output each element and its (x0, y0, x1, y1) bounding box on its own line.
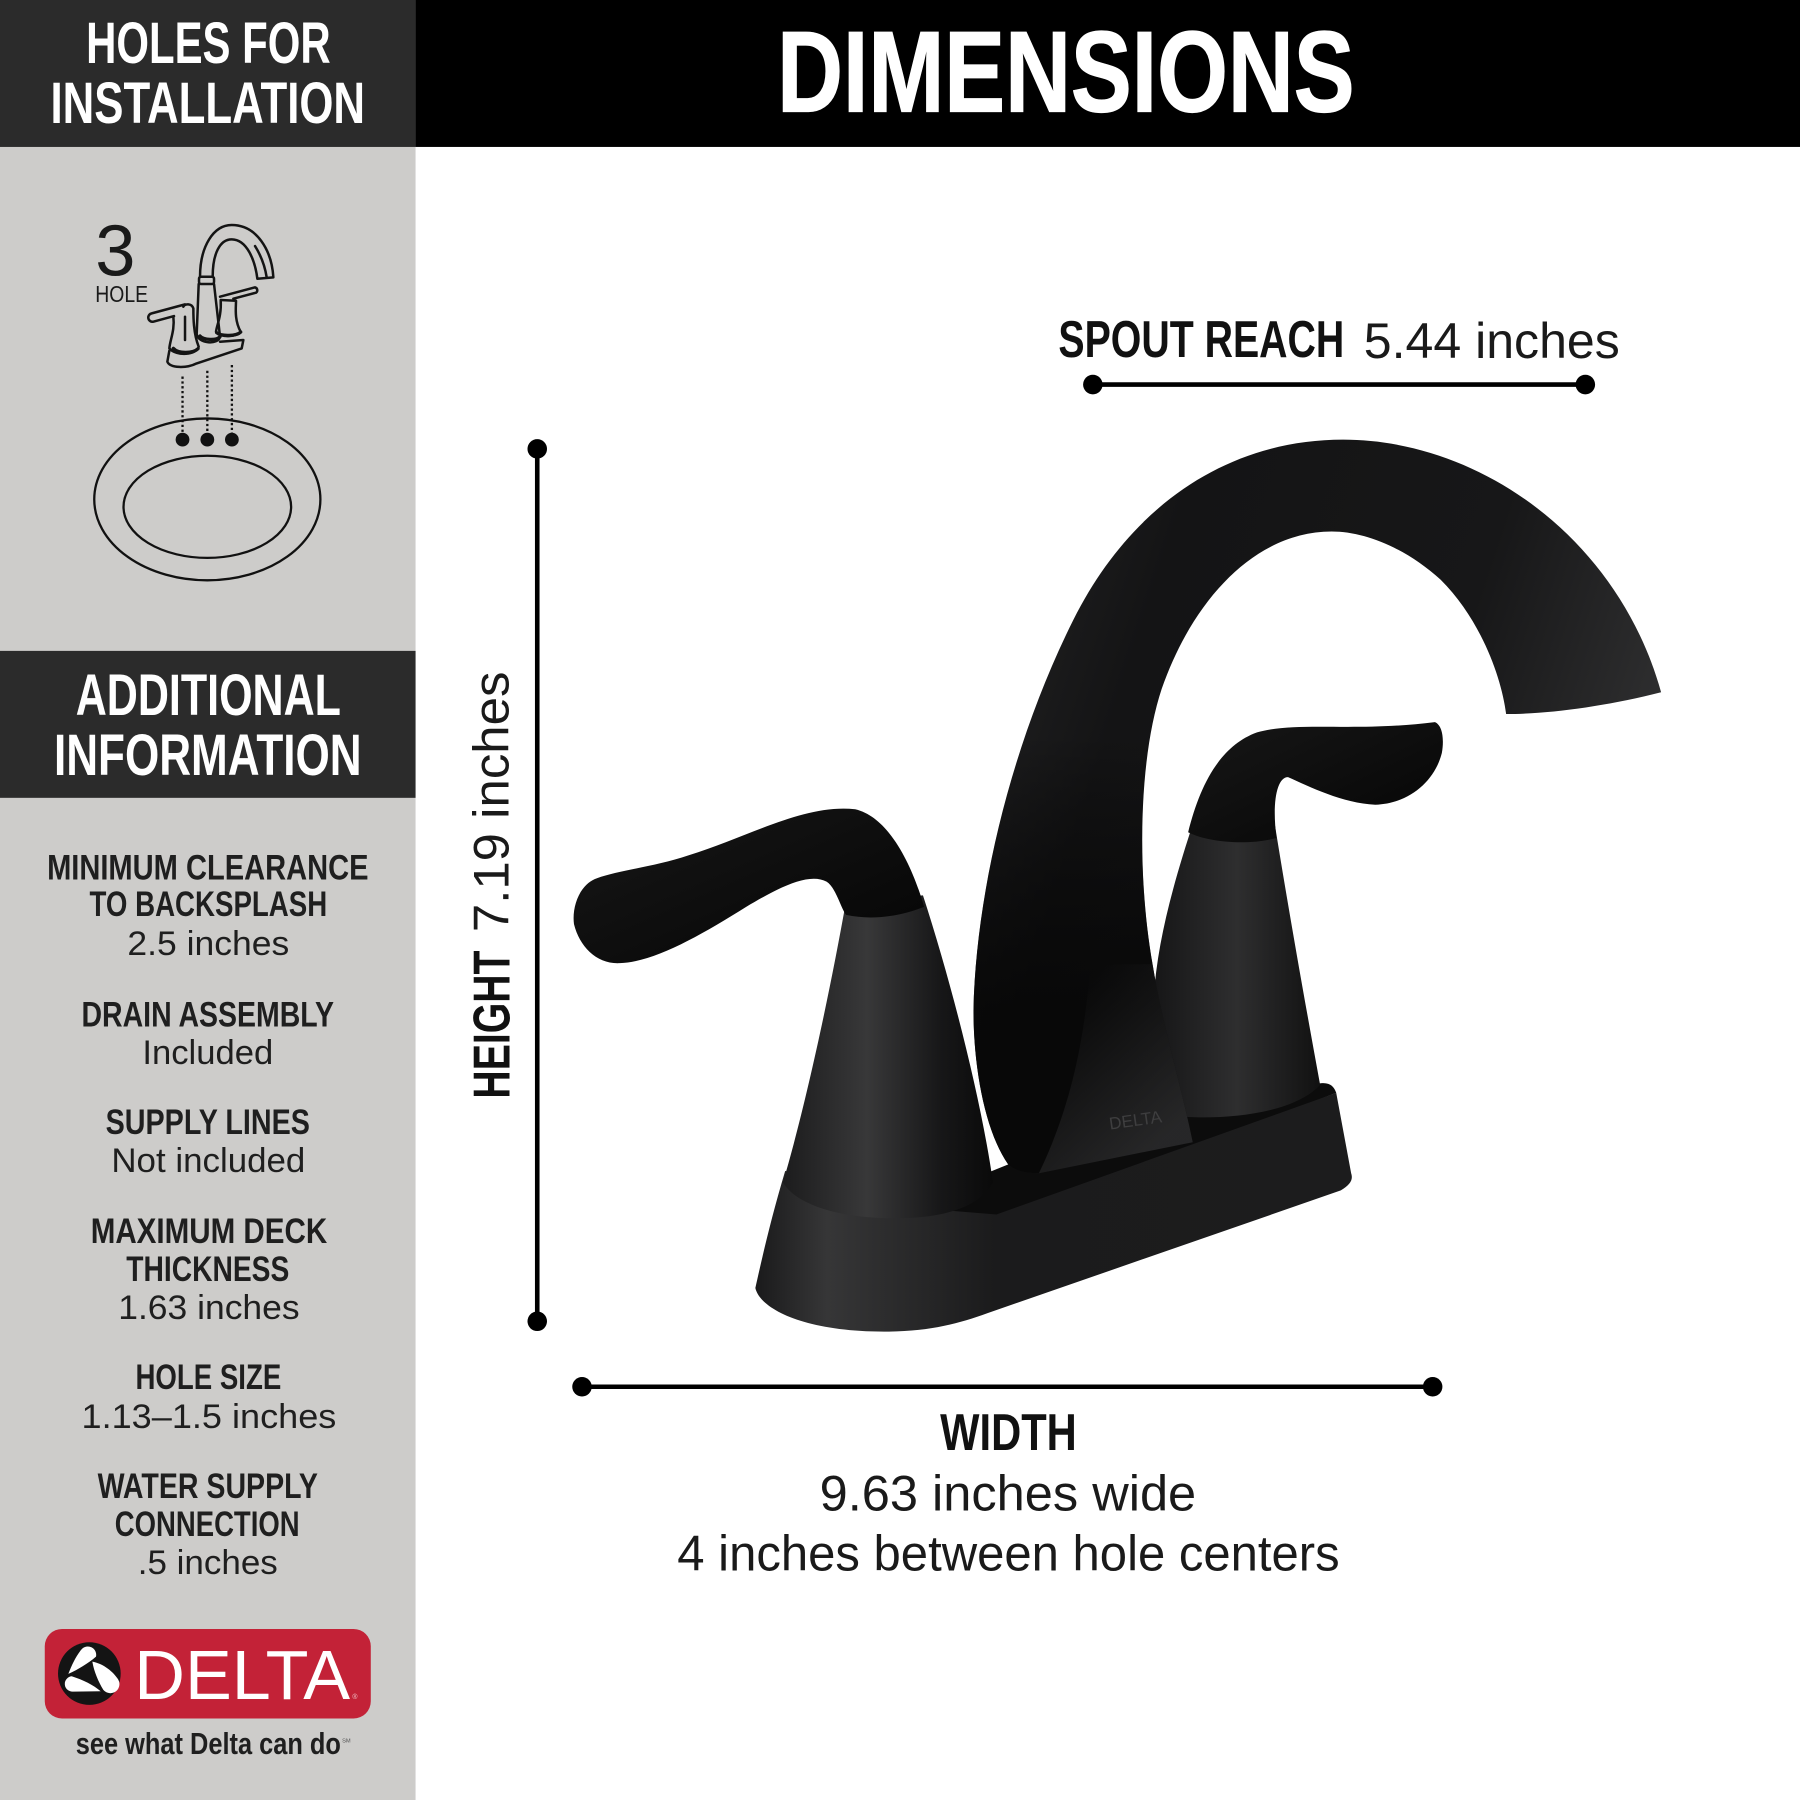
base top face (930, 1083, 1336, 1224)
label: 3 hole: 3 (95, 212, 135, 292)
heading: holes for installation (0, 0, 416, 147)
dimension: width (572, 1377, 1442, 1581)
spout logo text: DELTA (1108, 1106, 1164, 1134)
image: matte black faucet (574, 440, 1661, 1332)
dimension: height (463, 439, 547, 1331)
spec: hole size: HOLE SIZE (135, 1357, 281, 1397)
spout (973, 440, 1661, 1173)
logo wordmark: DELTA (134, 1636, 350, 1714)
spec: water supply connection (98, 1466, 318, 1582)
dimension: height: HEIGHT (463, 951, 521, 1099)
faucet base front (755, 1093, 1352, 1332)
spec: supply lines (106, 1102, 310, 1180)
logo: delta (45, 1629, 371, 1761)
dimension: spout reach: 5.44 inches (1364, 312, 1620, 369)
three holes (176, 433, 239, 447)
spec: hole size: 1.13–1.5 inches (82, 1398, 336, 1436)
heading: holes for installation: INSTALLATION (51, 71, 365, 136)
spec: drain assembly: DRAIN ASSEMBLY (82, 994, 334, 1034)
label: 3 hole (95, 212, 148, 307)
tagline: see what Delta can do (76, 1726, 341, 1761)
title: dimensions (416, 0, 1800, 147)
left handle lever (574, 809, 924, 963)
dimension: spout reach: SPOUT REACH (1058, 310, 1344, 368)
panel: left sidebar (0, 0, 416, 1800)
spec: minimum clearance: TO BACKSPLASH (90, 884, 327, 924)
spec: maximum deck thickness (91, 1211, 327, 1327)
sink outline (94, 418, 320, 580)
spec: drain assembly (82, 994, 334, 1072)
text block: specifications list (47, 847, 368, 1582)
spec: minimum clearance (47, 847, 368, 963)
right handle lever (1188, 722, 1443, 842)
heading: additional information: ADDITIONAL (76, 663, 341, 728)
logo badge (45, 1629, 371, 1718)
spout lower shading (974, 776, 1164, 1173)
spout lower facet (1039, 964, 1193, 1173)
label: 3 hole: HOLE (95, 281, 148, 307)
spec: water supply connection: WATER SUPPLY (98, 1466, 318, 1506)
dimension: height: 7.19 inches (463, 672, 520, 932)
spec: supply lines: Not included (111, 1142, 305, 1180)
logo mark (58, 1642, 121, 1705)
logo: delta: SM (342, 1739, 351, 1745)
dimension: width: 9.63 inches wide (820, 1465, 1196, 1522)
spec: supply lines: SUPPLY LINES (106, 1102, 310, 1142)
spec: minimum clearance: MINIMUM CLEARANCE (47, 847, 368, 887)
spec: maximum deck thickness: 1.63 inches (118, 1289, 300, 1327)
icon: three hole faucet over sink (94, 212, 320, 580)
spec: maximum deck thickness: MAXIMUM DECK (91, 1211, 327, 1251)
title: dimensions: DIMENSIONS (777, 8, 1355, 136)
icon: faucet line drawing (148, 225, 273, 367)
spec: water supply connection: .5 inches (138, 1544, 278, 1582)
right handle body (1154, 821, 1320, 1117)
heading: additional information (0, 651, 416, 798)
dotted guide lines (183, 365, 232, 434)
dimension: spout reach (1058, 310, 1620, 394)
heading: additional information: INFORMATION (54, 723, 362, 788)
dimension: width: WIDTH (940, 1403, 1077, 1461)
spec: minimum clearance: 2.5 inches (127, 925, 289, 963)
spec: drain assembly: Included (142, 1034, 273, 1072)
left handle body (783, 895, 993, 1218)
logo: delta: ® (352, 1693, 358, 1701)
spec: maximum deck thickness: THICKNESS (126, 1249, 289, 1289)
dimension: width: 4 inches between hole centers (677, 1524, 1340, 1581)
heading: holes for installation: HOLES FOR (86, 11, 331, 76)
spec: hole size (82, 1357, 336, 1436)
spec: water supply connection: CONNECTION (115, 1504, 300, 1544)
